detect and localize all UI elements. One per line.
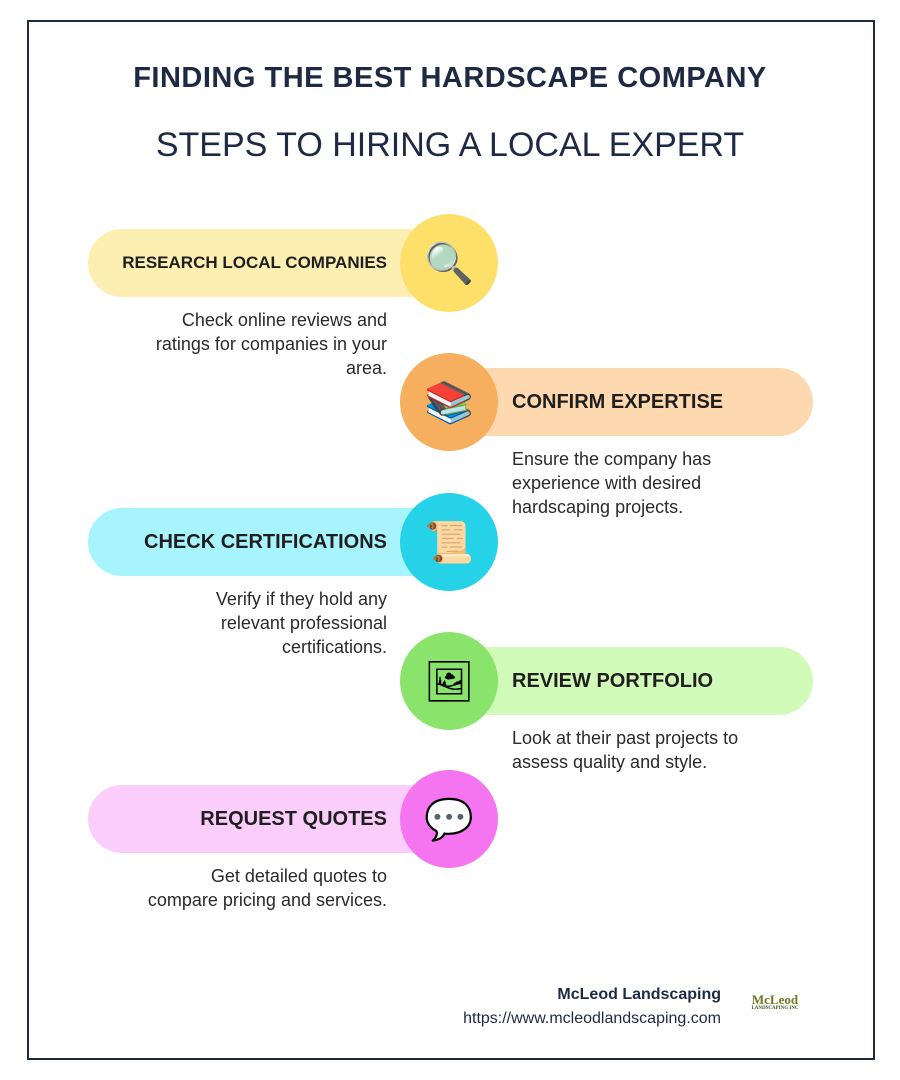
step 3: certifications — [88, 493, 498, 657]
step 4: portfolio — [400, 632, 813, 772]
step 2: expertise — [400, 353, 813, 517]
step 2: expertise: CONFIRM EXPERTISE — [512, 390, 723, 412]
step 1: research: 🔍 — [424, 242, 474, 286]
title: FINDING THE BEST HARDSCAPE COMPANY — [133, 62, 767, 94]
step 1: research: Check online reviews and ratings for companies in your area. — [156, 310, 387, 378]
step 5: quotes: 💬 — [424, 798, 474, 842]
subtitle: STEPS TO HIRING A LOCAL EXPERT — [156, 126, 744, 164]
step 4: portfolio: assess quality and style. — [512, 752, 707, 772]
step 3: certifications: 📜 — [424, 520, 474, 564]
logo: LANDSCAPING INC — [751, 1006, 799, 1011]
step 2: expertise: Ensure the company has experience with desired hardscaping projects. — [512, 449, 711, 517]
step 3: certifications: Verify if they hold any relevant professional certifications. — [216, 589, 387, 657]
step 4: portfolio: REVIEW PORTFOLIO — [512, 670, 713, 692]
step 5: quotes: Get detailed quotes to compare pricing and services. — [148, 866, 387, 910]
footer brand: https://www.mcleodlandscaping.com — [463, 1010, 721, 1027]
step 5: quotes: REQUEST QUOTES — [200, 808, 387, 830]
footer brand: McLeod Landscaping — [557, 986, 721, 1003]
step 1: research — [88, 214, 498, 378]
step 4: portfolio: Look at their past projects to — [512, 728, 738, 748]
step 4: portfolio: 🖼 — [424, 660, 474, 704]
step 5: quotes — [88, 770, 498, 910]
step 2: expertise: 📚 — [424, 380, 474, 424]
footer brand — [463, 986, 721, 1027]
step 3: certifications: CHECK CERTIFICATIONS — [144, 530, 387, 552]
logo: McLeod — [752, 992, 798, 1007]
step 1: research: RESEARCH LOCAL COMPANIES — [122, 253, 387, 272]
